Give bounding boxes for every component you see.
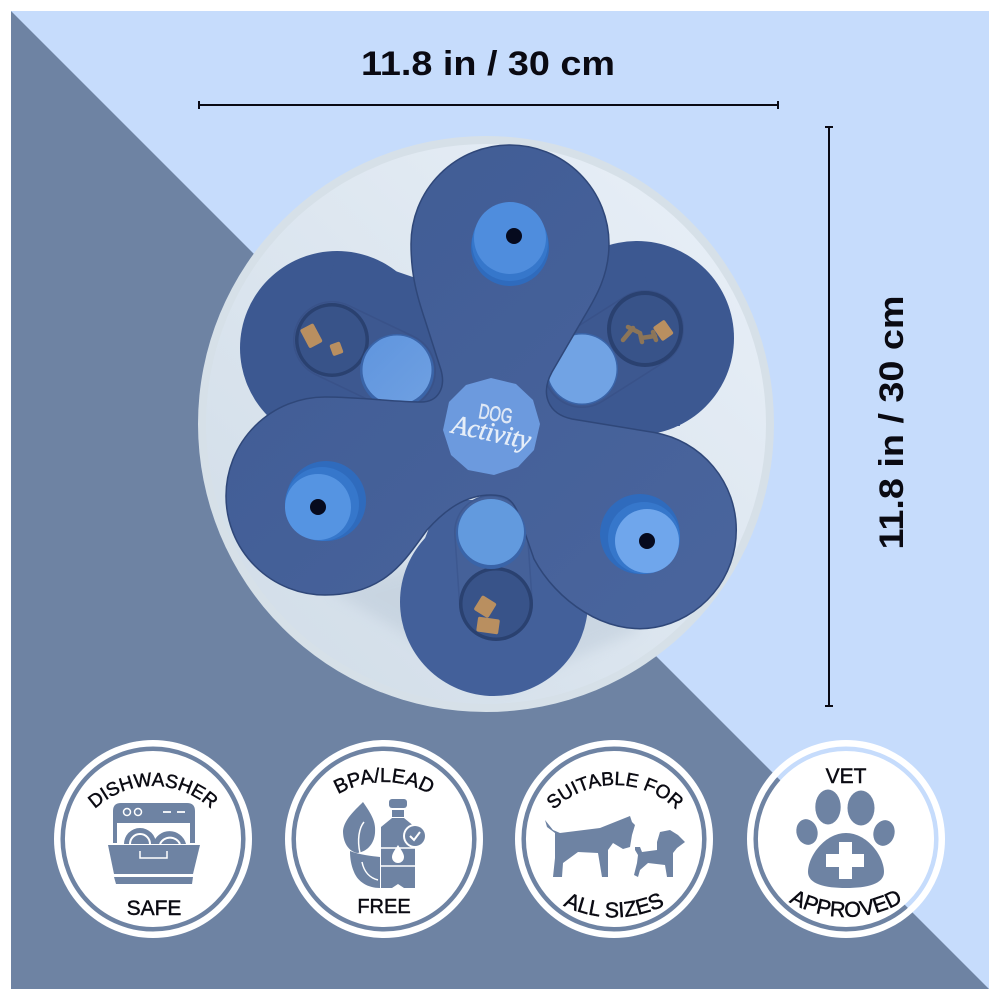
heading: width dimension: 11.8 in / 30 cm [361,45,615,83]
center logo badge: Activity [447,409,534,455]
heading: height dimension: 11.8 in / 30 cm [873,296,911,550]
cup left [285,461,366,541]
icon: paw with cross [793,790,898,888]
back lobe upper left [240,251,480,445]
back lobe bottom [400,500,588,696]
puzzle toy [226,145,736,696]
front star body [226,145,736,629]
cup top [471,202,549,286]
label: dishwasher: DISHWASHER [87,772,218,809]
badge: BPA/lead free [333,767,434,918]
label: free: FREE [357,896,411,918]
label: suitable for: SUITABLE FOR [547,772,683,810]
center logo badge: DOG [477,400,514,429]
toy shadow [330,510,640,690]
badge discs [54,740,945,938]
height dimension line [825,127,833,706]
label: safe: SAFE [127,897,181,920]
icon: two dogs [545,816,685,877]
label: all sizes: ALL SIZES [562,893,664,918]
center logo badge [443,378,540,475]
badge: vet approved [788,765,900,918]
label: approved: APPROVED [788,891,900,918]
badge: suitable for all sizes [545,772,685,918]
label: BPA/lead: BPA/LEAD [333,767,434,794]
width dimension line [199,101,778,109]
icon: leaves and bottle [343,799,427,888]
back lobe upper right [520,241,734,435]
round base plate [198,136,774,712]
cup right [600,494,680,574]
disc over bottom slot [456,499,526,569]
icon: dishwasher [108,803,200,884]
badge: dishwasher safe [87,772,218,920]
label: vet: VET [826,765,867,788]
